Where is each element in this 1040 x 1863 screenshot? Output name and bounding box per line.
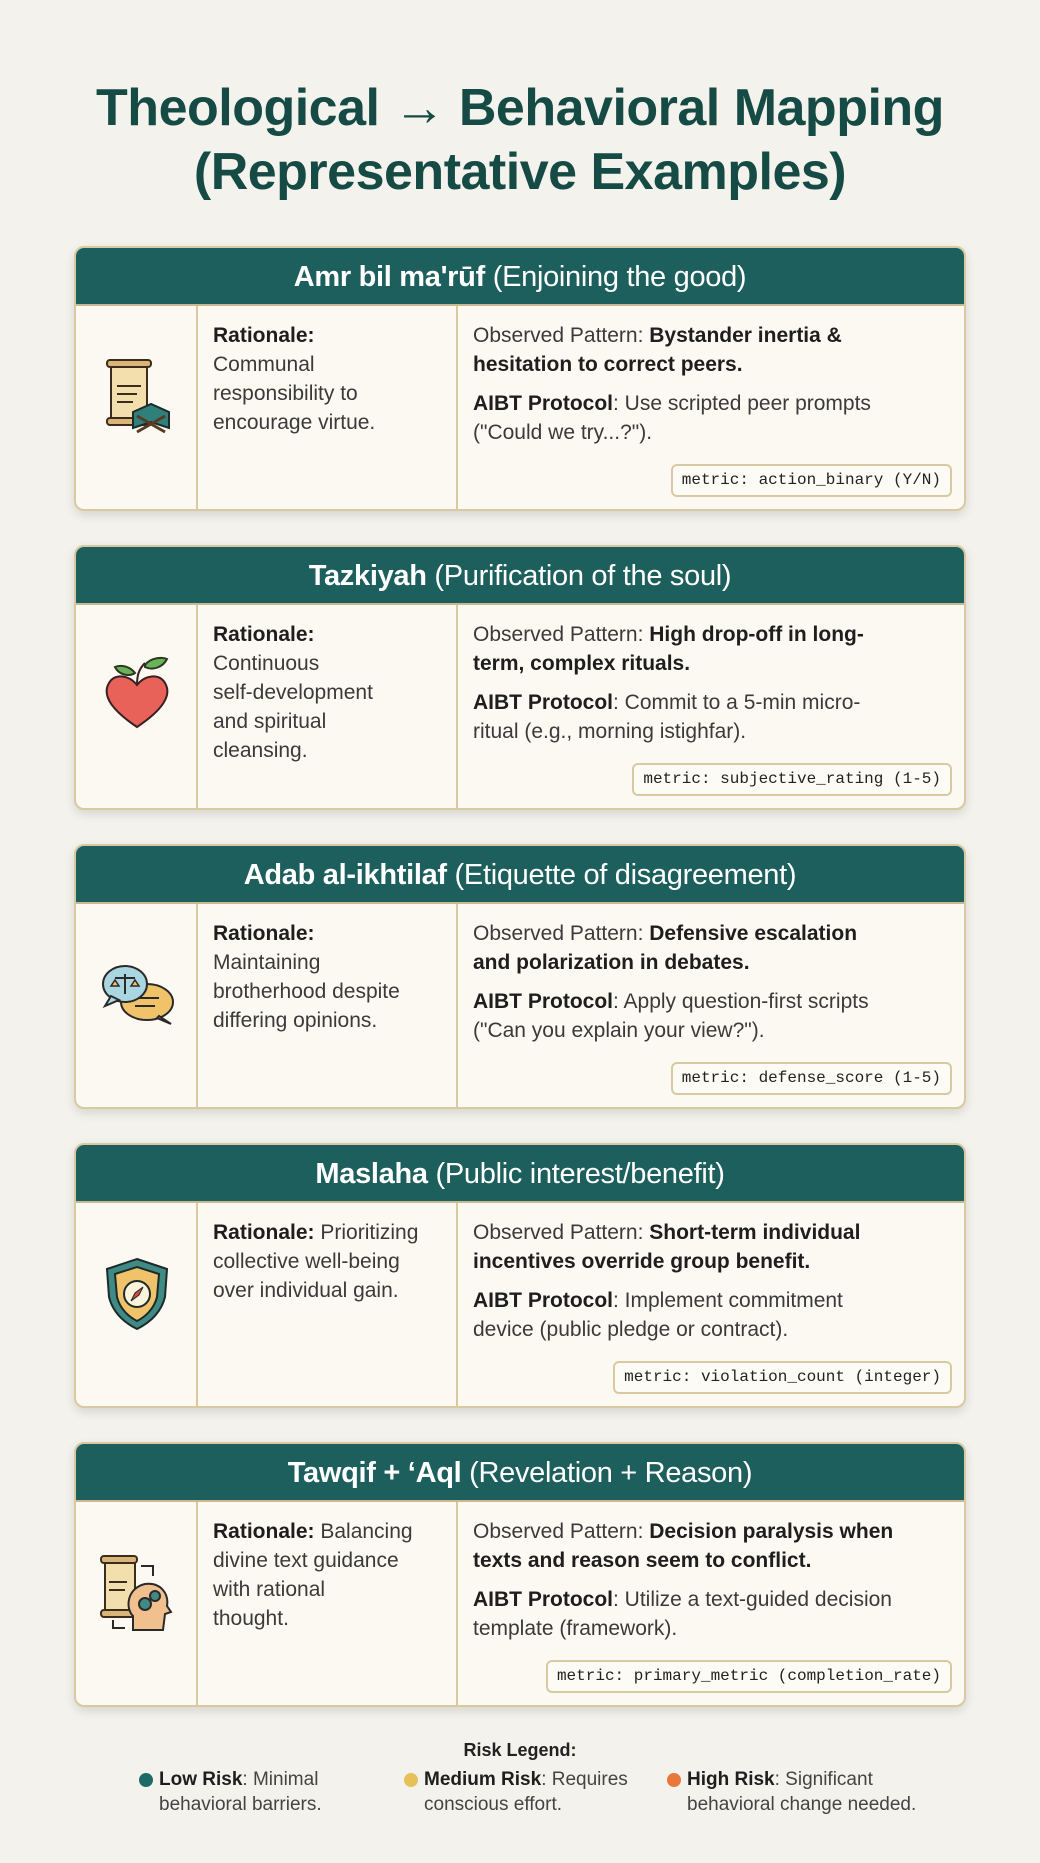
title: Theological → Behavioral Mapping <box>96 79 944 137</box>
header <box>76 1444 964 1502</box>
metric <box>546 1660 952 1693</box>
metric: metric: action_binary (Y/N) <box>682 471 941 489</box>
rationale <box>198 1502 458 1705</box>
rationale <box>198 1203 458 1406</box>
pattern and protocol: template (framework). <box>473 1617 677 1640</box>
pattern and protocol: hesitation to correct peers. <box>473 353 743 376</box>
rationale <box>198 605 458 808</box>
icon: heart with sprout <box>76 605 198 808</box>
header <box>76 846 964 904</box>
rationale: thought. <box>213 1607 289 1630</box>
rationale: divine text guidance <box>213 1549 399 1572</box>
pattern and protocol: ("Can you explain your view?"). <box>473 1019 765 1042</box>
rationale <box>198 904 458 1107</box>
rationale: Rationale: <box>213 324 315 347</box>
metric: metric: subjective_rating (1-5) <box>643 770 941 788</box>
title <box>96 79 944 201</box>
pattern and protocol <box>473 1221 952 1394</box>
pattern and protocol <box>473 623 952 796</box>
icon: shield with compass <box>76 1203 198 1406</box>
rationale: Communal <box>213 353 315 376</box>
pattern and protocol: AIBT Protocol: Utilize a text-guided decision <box>473 1588 892 1611</box>
pattern and protocol <box>473 1520 952 1693</box>
legend item: low risk: behavioral barriers. <box>159 1794 322 1815</box>
rationale: Rationale: Prioritizing <box>213 1221 418 1244</box>
legend item: medium risk: conscious effort. <box>424 1794 562 1815</box>
rationale: and spiritual <box>213 710 326 733</box>
pattern and protocol: AIBT Protocol: Use scripted peer prompts <box>473 392 871 415</box>
panel: Amr bil ma'ruf <box>74 246 966 511</box>
rationale <box>198 306 458 509</box>
icon: scroll and head with gears <box>76 1502 198 1705</box>
pattern and protocol <box>473 324 952 497</box>
header <box>76 1145 964 1203</box>
pattern and protocol: Observed Pattern: Defensive escalation <box>473 922 857 945</box>
legend item: high risk: High Risk: Significant <box>687 1769 873 1790</box>
panel: Tazkiyah <box>74 545 966 810</box>
pattern and protocol: AIBT Protocol: Commit to a 5-min micro- <box>473 691 860 714</box>
pattern and protocol: texts and reason seem to conflict. <box>473 1549 811 1572</box>
pattern and protocol: AIBT Protocol: Implement commitment <box>473 1289 843 1312</box>
header: Maslaha (Public interest/benefit) <box>315 1158 725 1190</box>
rationale: cleansing. <box>213 739 308 762</box>
rationale: self-development <box>213 681 373 704</box>
header: Adab al-ikhtilaf (Etiquette of disagreement) <box>244 859 796 891</box>
metric: metric: primary_metric (completion_rate) <box>557 1667 941 1685</box>
pattern and protocol: Observed Pattern: Bystander inertia & <box>473 324 842 347</box>
pattern and protocol: Observed Pattern: Decision paralysis when <box>473 1520 893 1543</box>
rationale: Rationale: Balancing <box>213 1520 413 1543</box>
pattern and protocol: device (public pledge or contract). <box>473 1318 788 1341</box>
panel: Tawqif + Aql <box>74 1442 966 1707</box>
pattern and protocol: incentives override group benefit. <box>473 1250 810 1273</box>
metric <box>613 1361 952 1394</box>
legend item: low risk <box>139 1769 322 1815</box>
pattern and protocol: term, complex rituals. <box>473 652 690 675</box>
pattern and protocol: Observed Pattern: High drop-off in long- <box>473 623 864 646</box>
header: Tazkiyah (Purification of the soul) <box>309 560 731 592</box>
pattern and protocol: AIBT Protocol: Apply question-first scripts <box>473 990 869 1013</box>
panel: Maslaha <box>74 1143 966 1408</box>
icon: speech bubbles <box>76 904 198 1107</box>
metric: metric: defense_score (1-5) <box>682 1069 941 1087</box>
metric <box>671 464 952 497</box>
rationale: Maintaining <box>213 951 320 974</box>
header: Amr bil ma'rūf (Enjoining the good) <box>294 261 746 293</box>
panel: Adab al-ikhtilaf <box>74 844 966 1109</box>
rationale: encourage virtue. <box>213 411 375 434</box>
legend item: low risk: Low Risk: Minimal <box>159 1769 318 1790</box>
pattern and protocol: ("Could we try...?"). <box>473 421 652 444</box>
pattern and protocol: Observed Pattern: Short-term individual <box>473 1221 860 1244</box>
legend item: medium risk <box>404 1769 628 1815</box>
legend <box>139 1740 916 1815</box>
title: (Representative Examples) <box>194 143 846 201</box>
rationale: Rationale: <box>213 922 315 945</box>
pattern and protocol: and polarization in debates. <box>473 951 750 974</box>
rationale: Continuous <box>213 652 319 675</box>
rationale: brotherhood despite <box>213 980 400 1003</box>
header <box>76 547 964 605</box>
icon: scroll and book <box>76 306 198 509</box>
pattern and protocol <box>473 922 952 1095</box>
legend title: Risk Legend: <box>463 1740 577 1760</box>
rationale: differing opinions. <box>213 1009 377 1032</box>
legend item: high risk: behavioral change needed. <box>687 1794 916 1815</box>
metric <box>671 1062 952 1095</box>
header <box>76 248 964 306</box>
legend item: medium risk: Medium Risk: Requires <box>424 1769 628 1790</box>
rationale: Rationale: <box>213 623 315 646</box>
metric: metric: violation_count (integer) <box>624 1368 941 1386</box>
rationale: collective well-being <box>213 1250 400 1273</box>
rationale: over individual gain. <box>213 1279 399 1302</box>
rationale: responsibility to <box>213 382 358 405</box>
rationale: with rational <box>213 1578 325 1601</box>
legend item: high risk <box>667 1769 916 1815</box>
header: Tawqif + ‘Aql (Revelation + Reason) <box>288 1457 752 1489</box>
pattern and protocol: ritual (e.g., morning istighfar). <box>473 720 746 743</box>
metric <box>632 763 952 796</box>
